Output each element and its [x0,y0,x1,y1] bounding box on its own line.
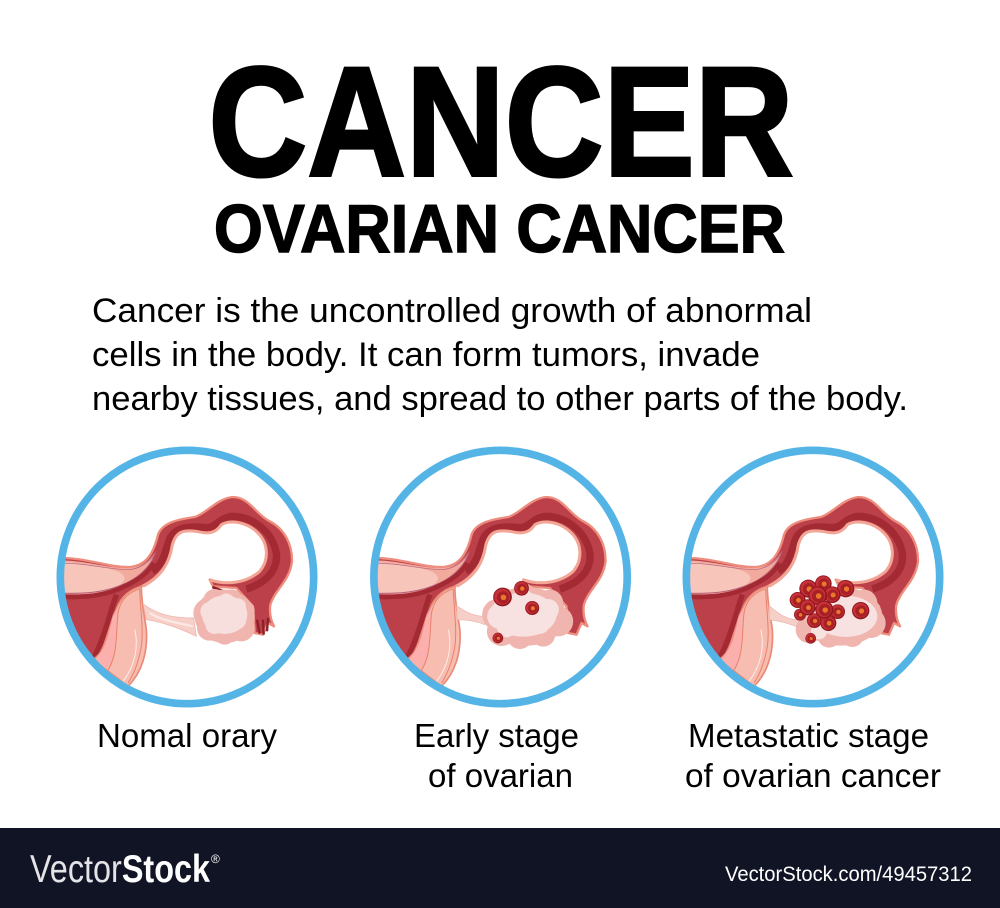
caption: metastatic stage: Metastatic stage [688,717,929,754]
registered mark: ® [211,852,220,866]
description text block: Cancer is the uncontrolled growth of abnormal [92,292,812,330]
tumor cluster [790,575,869,644]
description text block [92,292,908,418]
circle illustration: metastatic stage [682,450,940,704]
caption: early stage: Early stage [414,717,579,754]
subtitle: OVARIAN CANCER [214,191,785,267]
footer image id: VectorStock.com/49457312 [725,863,972,886]
panel: normal ovary [56,450,314,754]
footer logo: VectorStock [30,848,210,891]
caption: early stage [414,717,579,794]
circle illustration: normal ovary [56,450,314,704]
description text block: nearby tissues, and spread to other parts of the body. [92,380,908,418]
description text block: cells in the body. It can form tumors, invade [92,336,760,374]
caption: metastatic stage: of ovarian cancer [685,757,941,794]
panel: metastatic stage [682,450,941,794]
panel: early stage [370,450,627,794]
circle illustration: early stage [370,450,627,704]
title: CANCER [208,36,794,210]
caption: early stage: of ovarian [428,757,573,794]
caption: metastatic stage [685,717,941,794]
caption: normal ovary: Nomal orary [97,717,277,754]
footer bar [0,828,1000,908]
